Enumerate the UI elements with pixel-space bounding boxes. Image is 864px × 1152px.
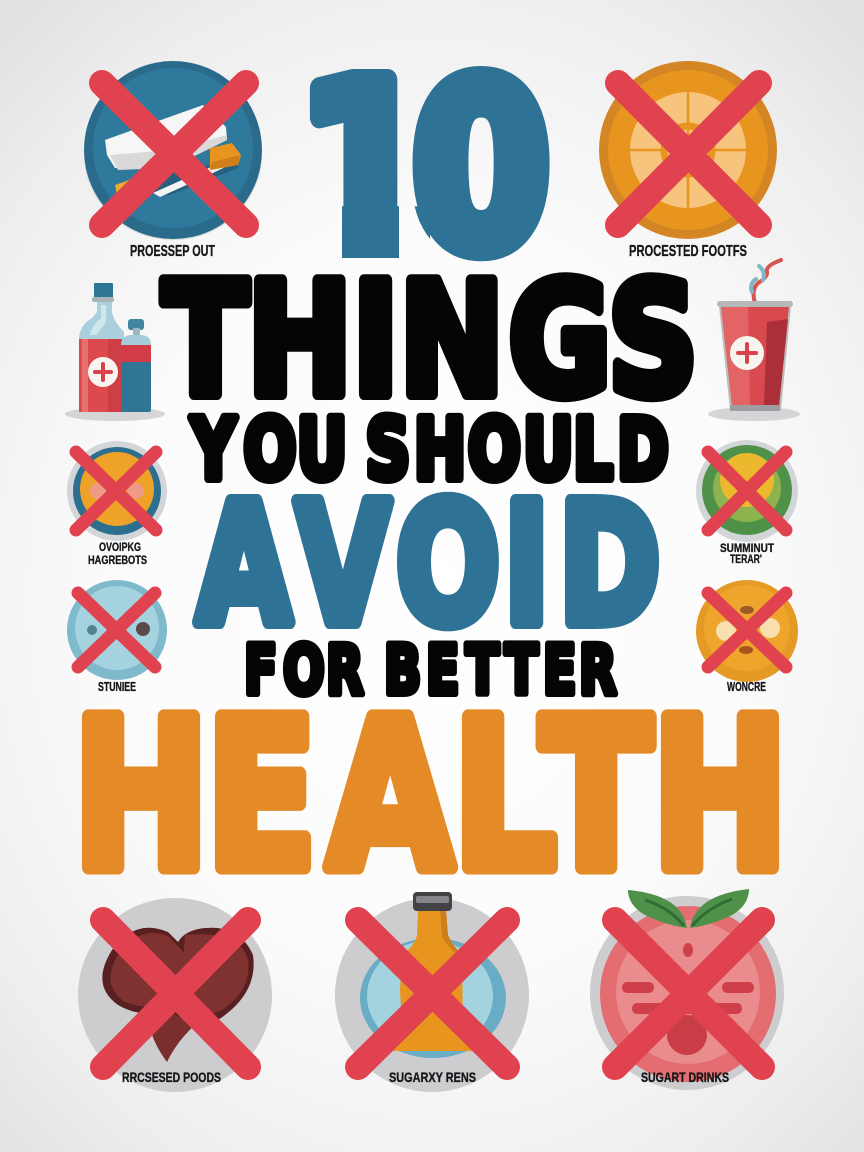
icon: crossed blue plate (67, 580, 167, 680)
label: PROESSEP OUT: PROESSEP OUT (130, 243, 215, 260)
title: YOU SHOULD: YOU SHOULD (190, 401, 669, 499)
label: STUNIEE: STUNIEE (98, 680, 136, 694)
label: OVOIPKG: OVOIPKG (99, 540, 141, 554)
icon: soda cup (708, 260, 800, 421)
label: PROCESTED FOOTFS: PROCESTED FOOTFS (629, 243, 747, 260)
label: HAGREBOTS: HAGREBOTS (88, 553, 147, 567)
icon: crossed tomato (590, 889, 784, 1090)
label: SUMMINUT: SUMMINUT (720, 541, 775, 555)
label: WONCRE: WONCRE (727, 680, 766, 694)
icon: crossed syrup bottle (335, 892, 529, 1092)
title: THINGS: THINGS (163, 251, 698, 431)
title: AVOID: AVOID (197, 469, 660, 662)
icon: crossed orange slice (599, 61, 777, 239)
title: FOR BETTER: FOR BETTER (244, 630, 617, 710)
title: 10: 10 (297, 36, 550, 302)
icon: crossed green plate (696, 440, 798, 542)
label: TERAR: TERAR' (730, 552, 762, 566)
icon: crossed processed meat (78, 898, 272, 1092)
icon: crossed cigarette (84, 61, 262, 240)
label: SUGART DRINKS: SUGART DRINKS (641, 1069, 729, 1085)
icon: crossed orange plate (696, 580, 798, 682)
title: HEALTH: HEALTH (73, 676, 788, 916)
label: RRCSESED POODS: RRCSESED POODS (122, 1069, 221, 1085)
label: SUGARXY RENS: SUGARXY RENS (389, 1069, 476, 1085)
icon: crossed meal plate (67, 441, 167, 541)
icon: medicine bottles (65, 283, 165, 421)
